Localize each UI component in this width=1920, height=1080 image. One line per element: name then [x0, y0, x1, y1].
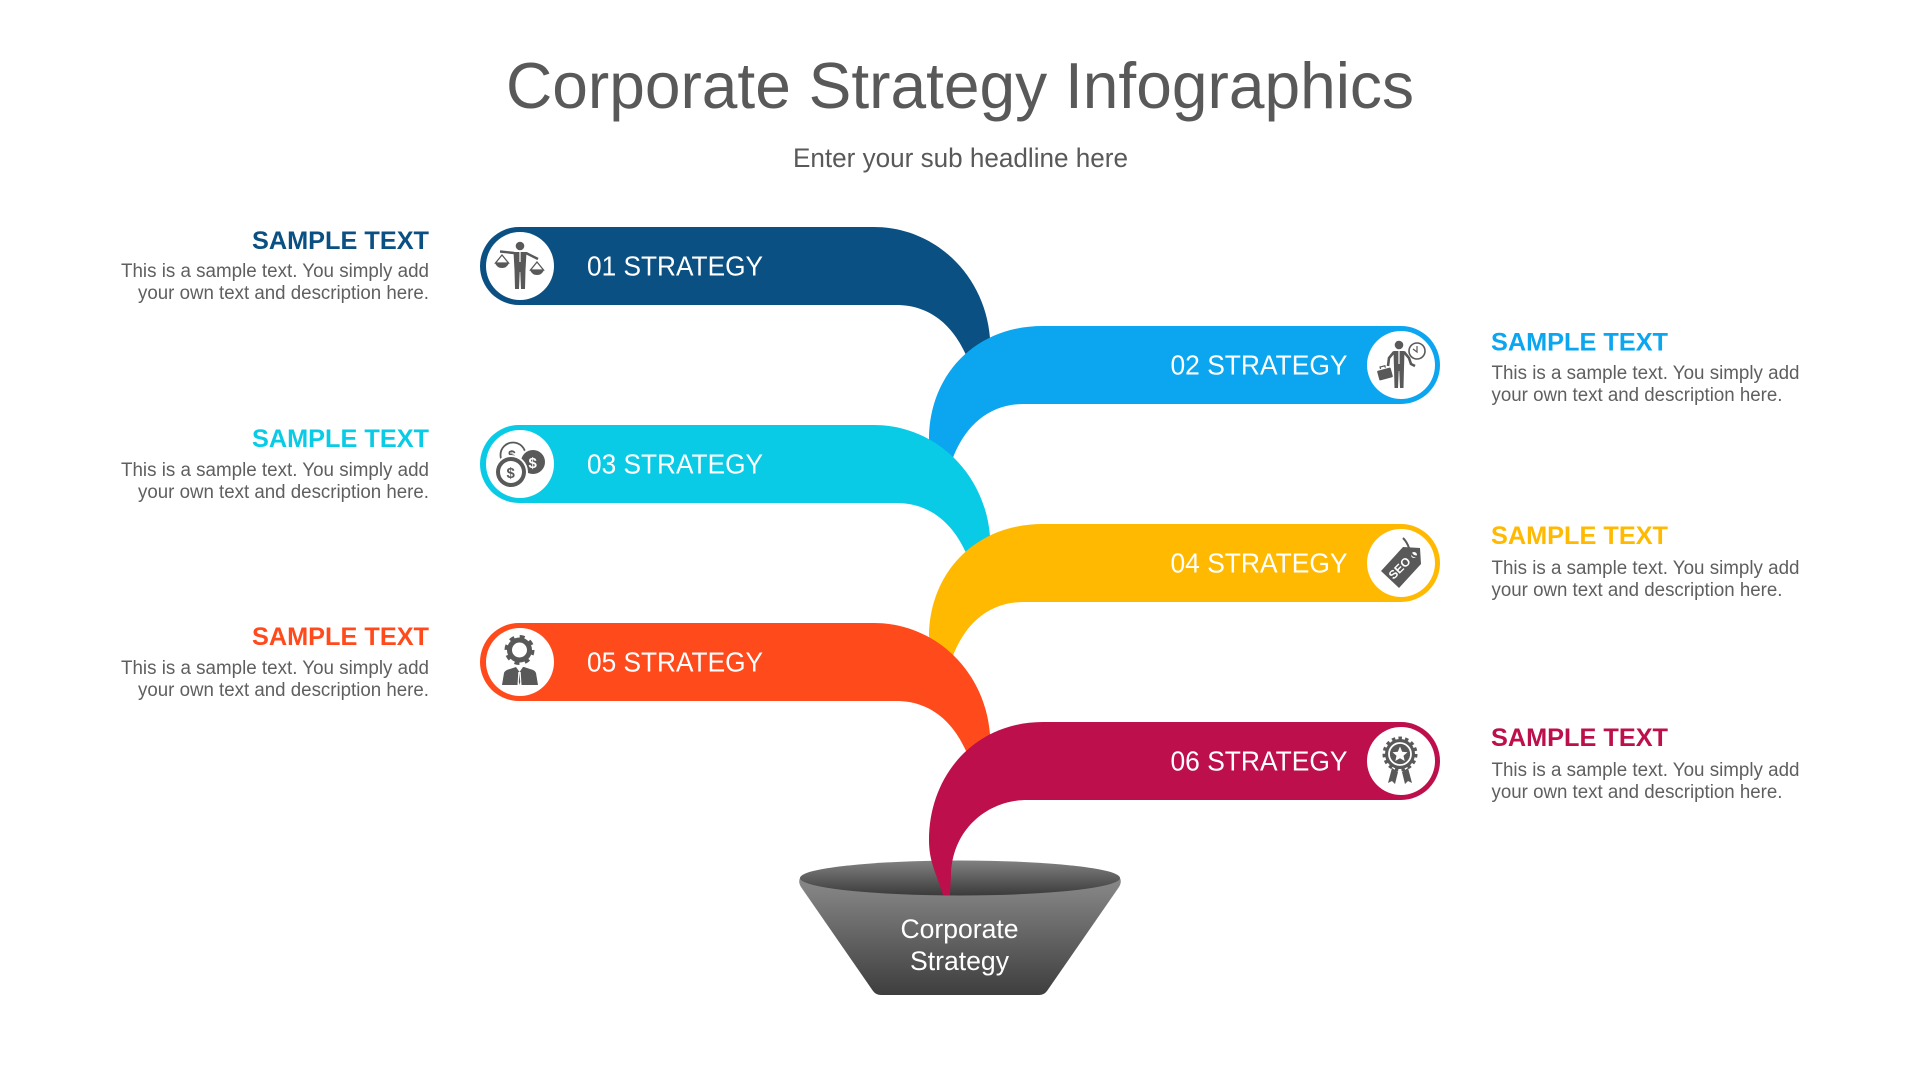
text block: 06: This is a sample text. You simply add	[1492, 760, 1800, 781]
text block: 01	[121, 227, 429, 304]
text block: 02: SAMPLE TEXT	[1491, 328, 1668, 356]
panel: 03 strategy	[480, 425, 992, 583]
funnel: corporate strategy	[799, 860, 1121, 995]
icon: coins	[494, 442, 547, 489]
text block: 02: This is a sample text. You simply add	[1492, 363, 1800, 384]
text block: 02: your own text and description here.	[1492, 385, 1782, 406]
text block: 01: your own text and description here.	[138, 283, 429, 304]
icon: coins: $	[506, 465, 516, 482]
panel: 04 strategy	[929, 524, 1440, 678]
text block: 04: SAMPLE TEXT	[1491, 522, 1668, 550]
text block: 02	[1491, 328, 1800, 406]
panel: 04 strategy: 04 STRATEGY	[1170, 548, 1348, 578]
text block: 03: SAMPLE TEXT	[252, 425, 429, 453]
text block: 01: This is a sample text. You simply add	[121, 261, 429, 282]
text block: 01: SAMPLE TEXT	[252, 227, 429, 255]
icon: award rosette	[1384, 738, 1416, 784]
icon: businessman with clock and briefcase	[1377, 341, 1425, 388]
text block: 05: your own text and description here.	[138, 680, 429, 701]
icon: SEO price tag: SEO	[1386, 554, 1414, 582]
panel: 02 strategy	[929, 326, 1440, 480]
text block: 05: SAMPLE TEXT	[252, 623, 429, 651]
icon: SEO price tag	[1381, 538, 1421, 588]
text block: 03: your own text and description here.	[138, 482, 429, 503]
text block: 04	[1491, 522, 1800, 601]
title: Corporate Strategy Infographics	[506, 49, 1414, 122]
panel: 05 strategy: 05 STRATEGY	[587, 646, 763, 678]
panel: 02 strategy: 02 STRATEGY	[1170, 350, 1348, 380]
icon: businessman with scales	[495, 242, 544, 289]
icon: coins: $	[508, 447, 516, 463]
text block: 03: This is a sample text. You simply add	[121, 460, 429, 481]
panel: 06 strategy with tail into funnel: 06 STRATEGY	[1170, 746, 1348, 776]
text block: 04: This is a sample text. You simply add	[1492, 558, 1800, 579]
text block: 06	[1491, 724, 1800, 803]
text block: 06: your own text and description here.	[1492, 782, 1782, 803]
funnel: corporate strategy: Corporate	[900, 914, 1018, 944]
text block: 05: This is a sample text. You simply add	[121, 658, 429, 679]
panel: 06 strategy with tail into funnel	[929, 722, 1440, 895]
subtitle: Enter your sub headline here	[793, 143, 1128, 173]
panel: 05 strategy	[480, 623, 992, 781]
text block: 03	[121, 425, 429, 503]
funnel: corporate strategy: Strategy	[910, 946, 1009, 976]
panel: 01 strategy: 01 STRATEGY	[587, 250, 763, 282]
text block: 05	[121, 623, 429, 701]
panel: 01 strategy	[480, 227, 992, 385]
icon: coins: $	[528, 455, 538, 472]
icon: manager with gear head	[502, 636, 538, 685]
panel: 03 strategy: 03 STRATEGY	[587, 448, 763, 480]
text block: 06: SAMPLE TEXT	[1491, 724, 1668, 752]
text block: 04: your own text and description here.	[1492, 580, 1782, 601]
